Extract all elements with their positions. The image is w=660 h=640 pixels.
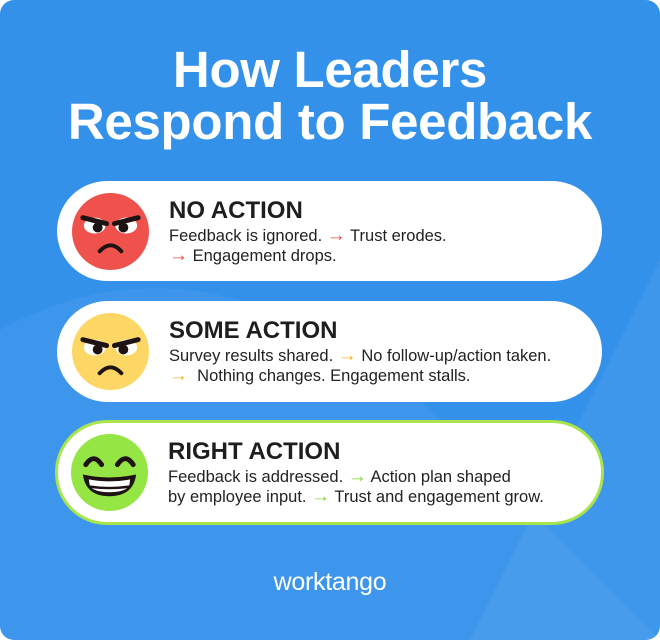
text [169,345,551,386]
panel: no action [57,181,602,281]
panel: some action [57,301,602,402]
text: Survey results shared. → No follow-up/action taken. [169,345,551,366]
title: How Leaders [173,41,487,98]
heading: NO ACTION [169,197,303,224]
text [169,225,447,266]
text: Feedback is addressed. → Action plan shaped [168,466,511,487]
text: Feedback is ignored. → Trust erodes. [169,225,447,246]
text: → Engagement drops. [169,245,337,266]
heading: RIGHT ACTION [168,438,340,465]
heading: SOME ACTION [169,317,337,344]
text: by employee input. → Trust and engagement grow. [168,486,544,507]
title: Respond to Feedback [68,93,592,150]
text [168,466,544,507]
text: → Nothing changes. Engagement stalls. [169,365,471,386]
title [68,41,592,150]
icon: angry face [72,193,149,270]
icon: grinning face [71,434,148,511]
panel: right action [55,420,604,525]
icon: annoyed face [72,313,149,390]
logo: worktango [274,568,386,596]
